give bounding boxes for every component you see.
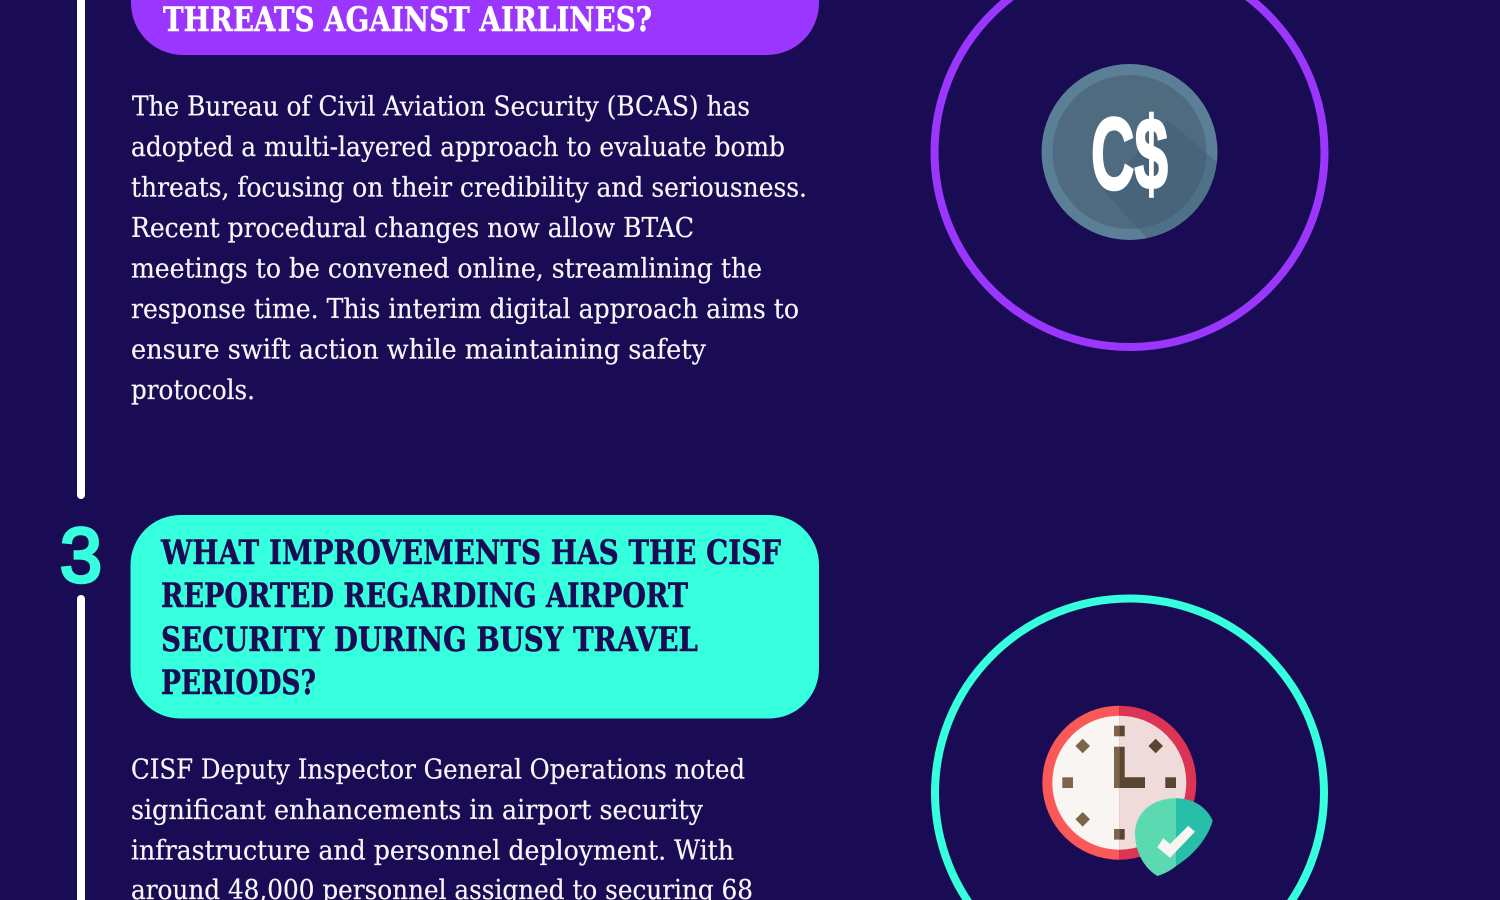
text block: section 2 body: threats, focusing on their credibility and seriousness.	[131, 172, 807, 204]
text block: section 3 body: significant enhancements in airport security	[131, 795, 704, 826]
icon: cyan ring with clock and shield check	[935, 598, 1324, 900]
text block: section 2 body: adopted a multi-layered approach to evaluate bomb	[131, 132, 785, 163]
text block: section 3 body: infrastructure and personnel deployment. With	[131, 836, 734, 866]
text block: section 2 body: The Bureau of Civil Aviation Security (BCAS) has	[132, 92, 750, 122]
panel: section 3 heading pill	[130, 515, 819, 718]
text block: section 3 body: CISF Deputy Inspector General Operations noted	[131, 754, 745, 786]
panel: section 3 heading pill: WHAT IMPROVEMENTS HAS THE CISF	[160, 533, 781, 573]
timeline line: lower segment	[77, 595, 85, 900]
panel: section 3 heading pill: PERIODS?	[161, 663, 316, 703]
panel: section 2 heading pill	[131, 0, 819, 55]
step number 3: 3	[60, 513, 102, 599]
panel: section 2 heading pill: THREATS AGAINST AIRLINES?	[163, 0, 652, 40]
text block: section 2 body: meetings to be convened online, streamlining the	[131, 254, 762, 284]
text block: section 3 body	[131, 754, 753, 900]
panel: section 3 heading pill: SECURITY DURING BUSY TRAVEL	[161, 620, 698, 660]
text block: section 2 body: ensure swift action while maintaining safety	[131, 334, 707, 366]
text block: section 2 body: Recent procedural changes now allow BTAC	[131, 213, 694, 244]
icon: purple ring with Canadian dollar coin: C$	[1091, 97, 1168, 211]
timeline line: upper segment	[77, 0, 85, 499]
text block: section 2 body: protocols.	[131, 375, 255, 406]
text block: section 2 body	[131, 92, 807, 406]
text block: section 2 body: response time. This interim digital approach aims to	[131, 294, 799, 325]
panel: section 3 heading pill: REPORTED REGARDING AIRPORT	[161, 576, 688, 616]
icon: purple ring with Canadian dollar coin	[934, 0, 1324, 347]
